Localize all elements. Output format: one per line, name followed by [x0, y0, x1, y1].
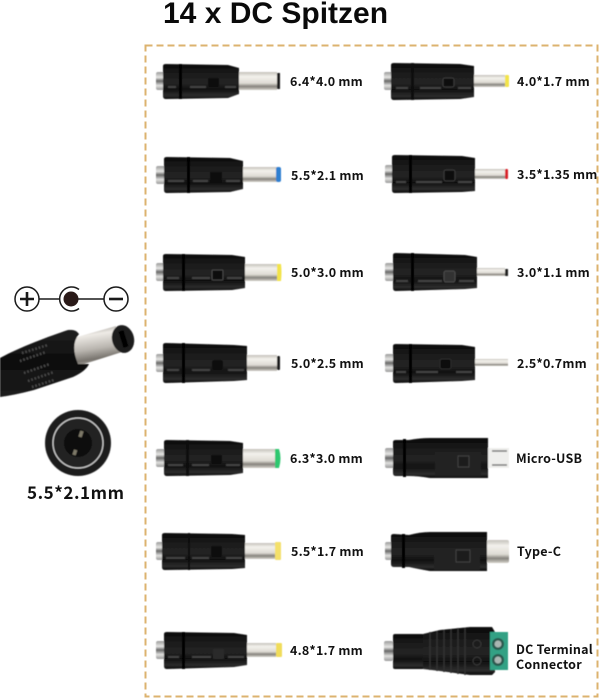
tip 3.0*1.1 mm: 3.0*1.1 mm: [517, 262, 590, 281]
tip Type-C: [385, 532, 561, 571]
tip 4.0*1.7 mm: [384, 63, 590, 100]
tip DC terminal connector: [384, 627, 593, 675]
tip 5.5*1.7 mm: 5.5*1.7 mm: [291, 541, 364, 560]
tip 5.5*2.1 mm: [156, 157, 364, 193]
tip 6.3*3.0 mm: 6.3*3.0 mm: [290, 448, 363, 467]
tip DC terminal connector: Connector: [516, 654, 582, 673]
tip 3.0*1.1 mm: [385, 253, 590, 291]
tip 4.8*1.7 mm: [156, 632, 363, 669]
polarity symbol: [15, 287, 128, 311]
tip 4.8*1.7 mm: 4.8*1.7 mm: [290, 640, 363, 659]
tip 2.5*0.7 mm: 2.5*0.7mm: [517, 353, 587, 372]
plug size label: 5.5*2.1mm: [27, 479, 125, 504]
tip 5.0*2.5 mm: 5.0*2.5 mm: [291, 353, 364, 372]
tip 4.0*1.7 mm: 4.0*1.7 mm: [517, 71, 590, 90]
tip DC terminal connector: DC Terminal: [516, 639, 593, 658]
tip 2.5*0.7 mm: [385, 344, 587, 383]
photo: plug end view: [45, 410, 111, 476]
tip Micro-USB: [385, 438, 582, 478]
tip 5.0*2.5 mm: [156, 343, 364, 383]
tip 6.4*4.0 mm: [156, 64, 363, 99]
dashed frame: [146, 46, 598, 696]
tip 5.0*3.0 mm: [156, 254, 364, 291]
tip Type-C: Type-C: [517, 541, 561, 560]
tip 3.5*1.35 mm: 3.5*1.35 mm: [517, 164, 597, 183]
photo: barrel plug: [0, 323, 137, 397]
tip Micro-USB: Micro-USB: [516, 448, 582, 467]
tip 6.3*3.0 mm: [156, 440, 363, 476]
tip 6.4*4.0 mm: 6.4*4.0 mm: [290, 71, 363, 90]
tip 5.5*2.1 mm: 5.5*2.1 mm: [291, 165, 364, 184]
tip 3.5*1.35 mm: [385, 155, 597, 193]
tip 5.5*1.7 mm: [156, 533, 364, 570]
tip 5.0*3.0 mm: 5.0*3.0 mm: [291, 262, 364, 281]
